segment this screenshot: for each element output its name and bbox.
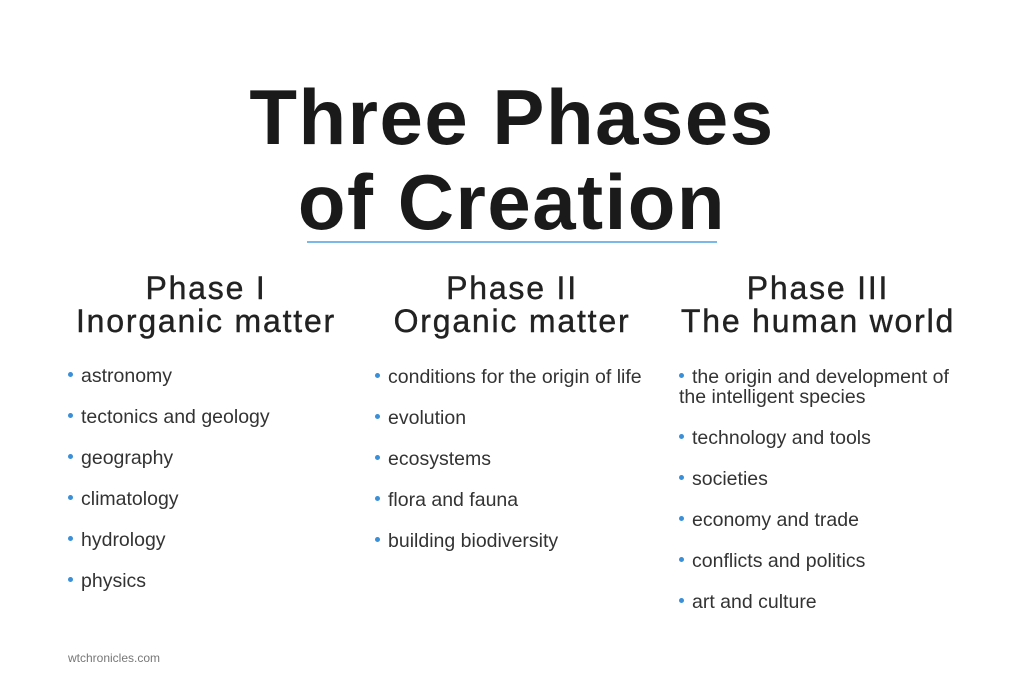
item: physics [81, 570, 146, 592]
list: phase III [679, 366, 949, 613]
item: astronomy [81, 365, 172, 387]
heading: phase I: Inorganic matter [76, 303, 336, 339]
heading: phase III [681, 270, 955, 339]
item: tectonics and geology [81, 406, 270, 428]
heading: phase III: The human world [681, 303, 955, 339]
item: evolution [388, 407, 466, 429]
item: economy and trade [692, 509, 859, 531]
item: technology and tools [692, 427, 871, 449]
heading: phase I: Phase I [145, 270, 267, 306]
item: hydrology [81, 529, 166, 551]
title [249, 73, 775, 246]
item: building biodiversity [388, 530, 558, 552]
heading: phase I [76, 270, 336, 339]
heading: phase II: Organic matter [394, 303, 630, 339]
list: phase II [375, 366, 642, 552]
item: societies [692, 468, 768, 490]
item [679, 366, 949, 408]
item: the intelligent species [679, 386, 865, 408]
item: conditions for the origin of life [388, 366, 642, 388]
heading: phase II: Phase II [446, 270, 578, 306]
item: ecosystems [388, 448, 491, 470]
item: the origin and development of [692, 366, 949, 388]
heading: phase II [394, 270, 630, 339]
item: climatology [81, 488, 179, 510]
title: of Creation [298, 158, 726, 246]
item: conflicts and politics [692, 550, 865, 572]
footer: wtchronicles.com [68, 651, 160, 665]
title underline [307, 241, 717, 243]
item: flora and fauna [388, 489, 518, 511]
item: geography [81, 447, 173, 469]
list: phase I [68, 365, 270, 592]
title: Three Phases [249, 73, 775, 161]
heading: phase III: Phase III [747, 270, 889, 306]
item: art and culture [692, 591, 817, 613]
